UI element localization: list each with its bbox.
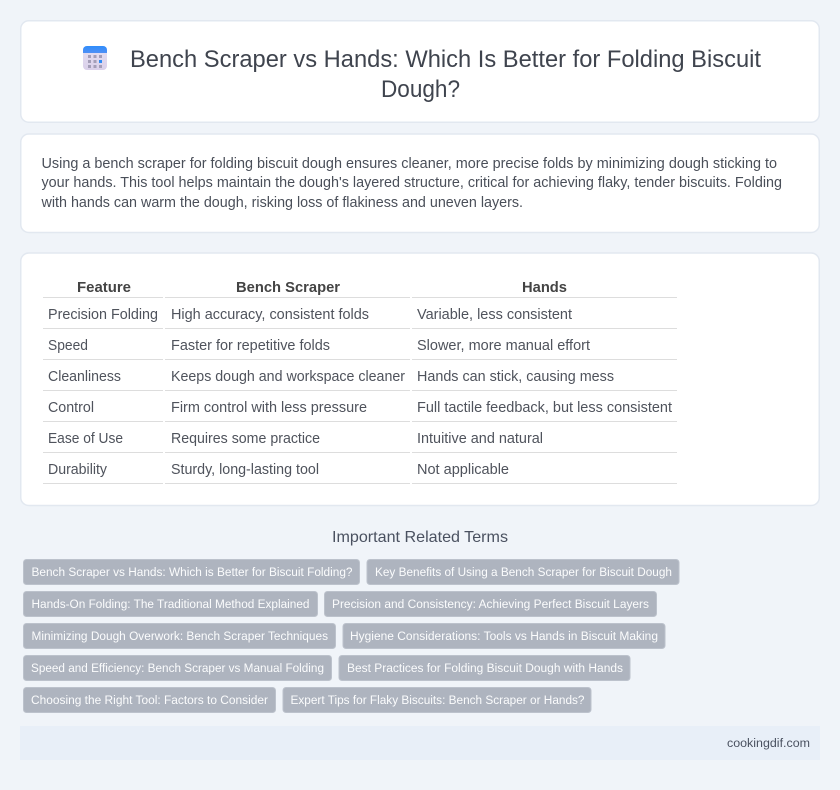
tag [24, 656, 332, 680]
footer: cookingdif.com [727, 736, 810, 750]
intro text block [41, 156, 782, 211]
tag: Expert Tips for Flaky Biscuits: Bench Scraper or Hands? [290, 693, 585, 707]
tag [339, 656, 630, 680]
row: control [43, 400, 677, 422]
tag [283, 688, 591, 712]
tag: Speed and Efficiency: Bench Scraper vs Manual Folding [31, 661, 324, 675]
intro text block: with hands can warm the dough, risking loss of flakiness and uneven layers. [41, 195, 523, 211]
panel: comparison table [21, 253, 819, 506]
table header row [43, 280, 677, 298]
row: speed: Speed [48, 338, 88, 354]
row: ease of use: Ease of Use [48, 431, 123, 447]
tag: Precision and Consistency: Achieving Perfect Biscuit Layers [332, 597, 649, 611]
row: precision folding [43, 307, 677, 329]
table header row: Feature [77, 280, 131, 296]
row: speed: Slower, more manual effort [417, 338, 590, 354]
row: cleanliness [43, 369, 677, 391]
intro text block: your hands. This tool helps maintain the dough's layered structure, critical for achieving flaky, tender biscuits. Folding [42, 175, 782, 191]
title [130, 46, 761, 103]
row: durability: Sturdy, long-lasting tool [171, 462, 319, 478]
row: speed: Faster for repetitive folds [171, 338, 330, 354]
intro text block: Using a bench scraper for folding biscuit dough ensures cleaner, more precise folds by minimizing dough sticking to [42, 156, 777, 172]
tag: Hygiene Considerations: Tools vs Hands in Biscuit Making [350, 629, 658, 643]
tag [24, 624, 336, 648]
tag [324, 592, 656, 616]
tag [24, 688, 276, 712]
row: durability: Durability [48, 462, 108, 478]
heading: important related terms: Important Related Terms [332, 529, 508, 546]
tag: Hands-On Folding: The Traditional Method Explained [32, 597, 310, 611]
table header row: Bench Scraper [236, 280, 340, 296]
row: control: Control [48, 400, 94, 416]
row: ease of use: Requires some practice [171, 431, 320, 447]
panel: introduction [21, 134, 819, 232]
row: cleanliness: Hands can stick, causing mess [417, 369, 614, 385]
row: control: Full tactile feedback, but less consistent [417, 400, 672, 416]
row: cleanliness: Keeps dough and workspace cleaner [171, 369, 405, 385]
row: cleanliness: Cleanliness [48, 369, 121, 385]
row: durability: Not applicable [417, 462, 509, 478]
row: ease of use: Intuitive and natural [417, 431, 543, 447]
tag [24, 560, 360, 584]
tag: Key Benefits of Using a Bench Scraper for Biscuit Dough [375, 565, 672, 579]
tag: Choosing the Right Tool: Factors to Consider [31, 693, 268, 707]
row: ease of use [43, 431, 677, 453]
icon: calendar [83, 46, 107, 70]
title: Bench Scraper vs Hands: Which Is Better for Folding Biscuit [130, 46, 761, 73]
row: precision folding: High accuracy, consistent folds [171, 307, 369, 323]
title: Dough? [381, 76, 460, 103]
tag: Minimizing Dough Overwork: Bench Scraper Techniques [32, 629, 328, 643]
row: control: Firm control with less pressure [171, 400, 367, 416]
row: precision folding: Variable, less consistent [417, 307, 572, 323]
table header row: Hands [522, 280, 567, 296]
row: precision folding: Precision Folding [48, 307, 158, 323]
tag [24, 592, 318, 616]
tag [343, 624, 665, 648]
row: durability [43, 462, 677, 484]
panel: header [21, 21, 819, 122]
panel: related term tags [24, 560, 679, 712]
tag [367, 560, 679, 584]
footer [20, 726, 820, 760]
row: speed [43, 338, 677, 360]
tag: Bench Scraper vs Hands: Which is Better for Biscuit Folding? [32, 565, 353, 579]
tag: Best Practices for Folding Biscuit Dough with Hands [347, 661, 623, 675]
